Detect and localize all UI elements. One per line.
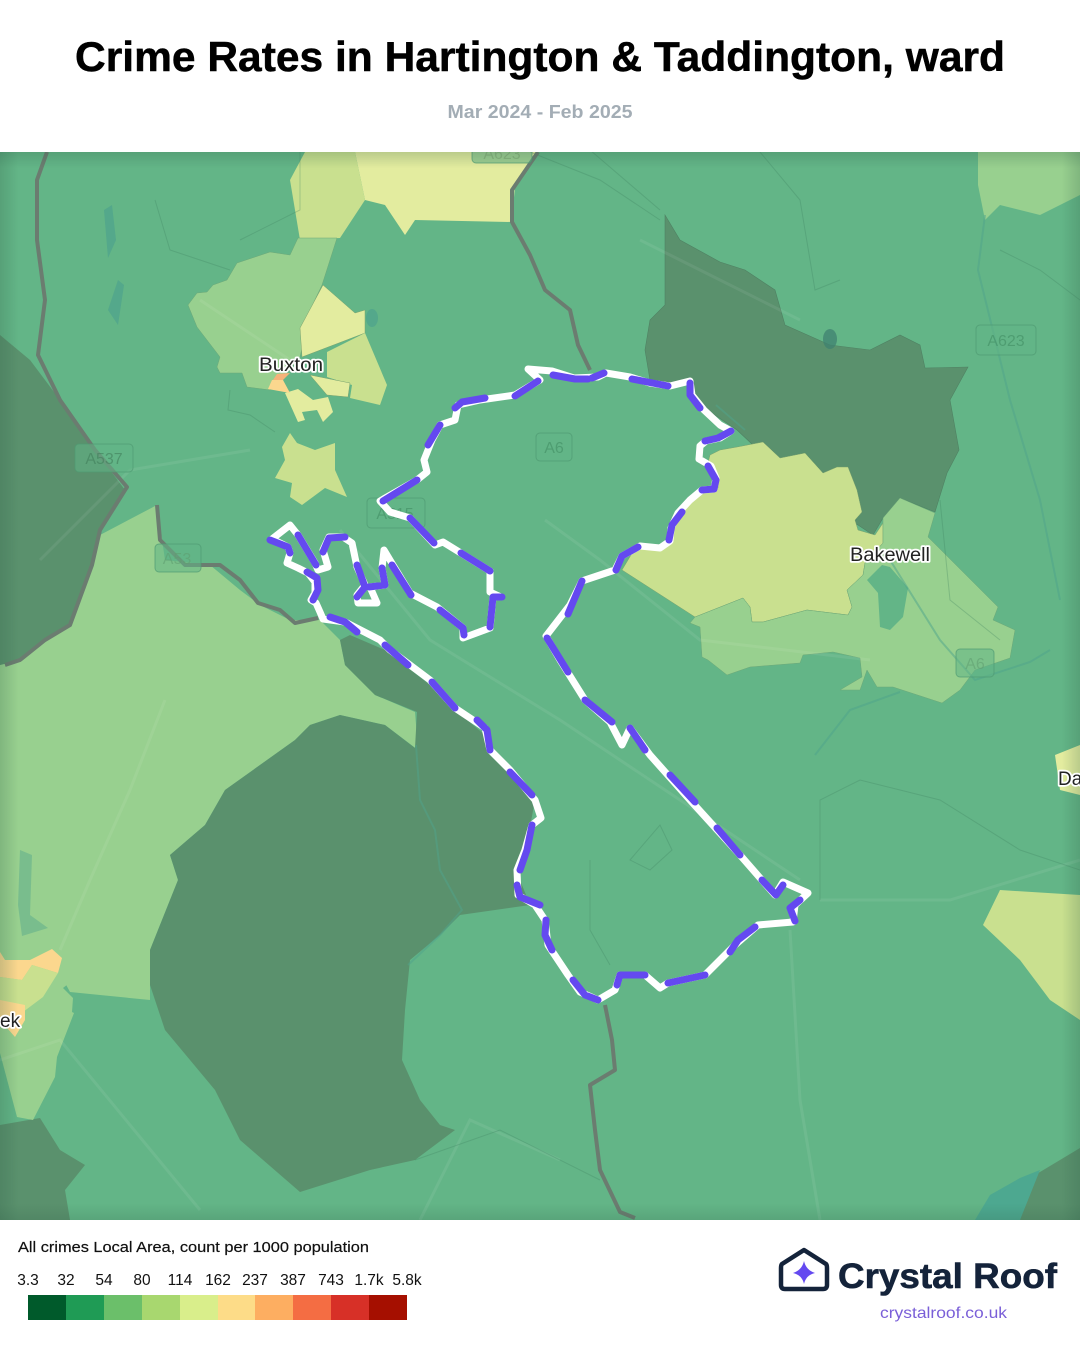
region: Bakewell centre xyxy=(867,565,908,630)
shield: A623 north: A623 xyxy=(483,146,521,163)
legend xyxy=(17,1239,422,1320)
shield: A623 north xyxy=(472,152,532,164)
legend values xyxy=(17,1272,422,1289)
icon: purple star xyxy=(793,1261,815,1284)
icon: house outline xyxy=(781,1250,827,1289)
region: Leek orange xyxy=(0,1000,25,1037)
region: top pale area xyxy=(290,152,365,240)
region: Buxton pale north xyxy=(300,285,365,357)
region: far east yellow xyxy=(1055,745,1080,795)
legend values: 54 xyxy=(95,1272,113,1289)
legend values: 162 xyxy=(205,1272,231,1289)
logo wordmark: Crystal Roof xyxy=(838,1257,1057,1296)
legend values: 1.7k xyxy=(354,1272,384,1289)
region: Buxton centre green xyxy=(285,375,322,400)
region: top yellow area xyxy=(355,152,538,235)
legend colour scale xyxy=(28,1295,407,1320)
region: pale area west of Bakewell xyxy=(622,442,883,622)
region: Buxton small pale xyxy=(310,375,350,397)
shield: A623 east: A623 xyxy=(987,333,1025,350)
logo: Crystal Roof xyxy=(781,1250,1057,1322)
shield: A537: A537 xyxy=(85,451,123,468)
region: Leek yellow xyxy=(0,949,62,980)
region: central dark area xyxy=(150,635,535,1192)
shield: A537 xyxy=(75,444,133,472)
region: Leek pale xyxy=(0,965,58,1012)
shield: A53: A53 xyxy=(163,551,191,568)
legend values: 32 xyxy=(57,1272,75,1289)
label: Bakewell: Bakewell xyxy=(850,545,930,566)
boundaries xyxy=(155,150,1080,1180)
shield: A6 centre xyxy=(536,433,572,461)
shield: A623 east xyxy=(976,325,1036,355)
region: light area around Bakewell xyxy=(690,498,1015,703)
legend values: 387 xyxy=(280,1272,306,1289)
legend values: 237 xyxy=(242,1272,268,1289)
logo url: crystalroof.co.uk xyxy=(880,1305,1008,1322)
region: north-east dark area xyxy=(645,215,968,535)
ward outline: white xyxy=(272,369,808,1000)
label: Buxton: Buxton xyxy=(259,355,323,376)
map base area xyxy=(0,152,1080,1220)
region: south-east dark corner xyxy=(1020,1148,1080,1220)
region: western edge dark area xyxy=(0,335,125,665)
region: Buxton orange xyxy=(273,373,290,380)
region: western light area xyxy=(0,505,418,1000)
region: Buxton light area xyxy=(188,238,337,390)
legend values: 5.8k xyxy=(392,1272,422,1289)
shield: A6 centre: A6 xyxy=(544,440,564,457)
legend values: 80 xyxy=(133,1272,151,1289)
water bodies xyxy=(18,205,837,936)
title: Crime Rates in Hartington & Taddington, ward xyxy=(75,33,1005,80)
legend values: 114 xyxy=(168,1272,193,1289)
region: south-east pale area xyxy=(983,890,1080,1020)
shield: A53 xyxy=(155,544,201,572)
ward outline: purple dashes xyxy=(270,373,800,1000)
legend title: All crimes Local Area, count per 1000 population xyxy=(18,1239,369,1256)
region: Buxton pale east xyxy=(327,333,387,405)
region: south Buxton pale blob xyxy=(275,433,347,505)
region: top right light area xyxy=(978,152,1080,220)
subtitle: date range: Mar 2024 - Feb 2025 xyxy=(448,101,632,122)
map edge shading xyxy=(0,152,1080,1220)
legend values: 743 xyxy=(318,1272,344,1289)
county boundary lines xyxy=(5,152,635,1218)
label: ek: ek xyxy=(0,1011,21,1032)
place labels xyxy=(0,355,1080,1032)
shield: A6 Bakewell: A6 xyxy=(965,656,985,673)
region: Leek light area xyxy=(0,950,74,1120)
ward boundary xyxy=(270,369,808,1000)
region: Buxton pale south xyxy=(285,389,333,422)
shield: A515 xyxy=(367,498,425,528)
rivers xyxy=(408,215,1060,965)
legend values: 3.3 xyxy=(17,1272,39,1289)
road shields xyxy=(75,135,1036,677)
shield: A515: A515 xyxy=(376,506,414,523)
region: south-west dark area xyxy=(0,1118,85,1220)
region: Buxton yellow xyxy=(268,380,290,393)
shield: A6 Bakewell xyxy=(956,649,994,677)
water: south-east teal patch xyxy=(975,1170,1040,1220)
roads and paths xyxy=(0,240,1080,1220)
